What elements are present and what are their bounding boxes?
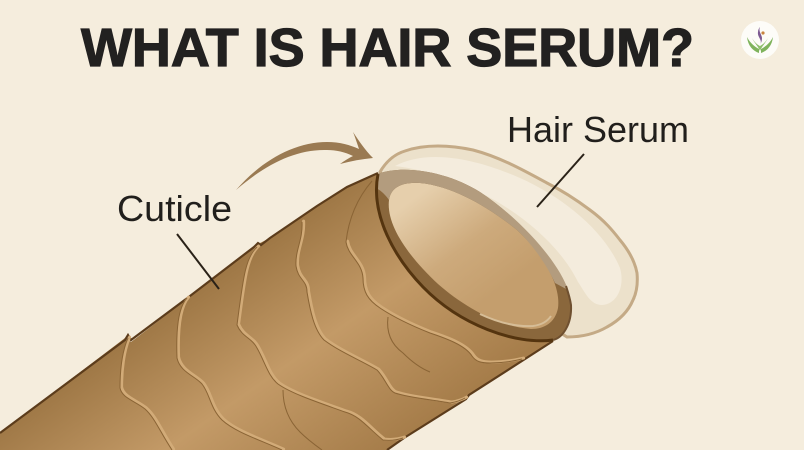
ring serum-tinted upper arc bbox=[376, 170, 568, 290]
pointer: hair serum bbox=[537, 154, 584, 207]
ring dark outer edge bbox=[376, 174, 553, 341]
hair outline top bbox=[0, 173, 378, 433]
inner face lower highlight bbox=[480, 314, 551, 326]
cuticle scale highlights bbox=[122, 221, 524, 449]
serum highlight bbox=[395, 157, 622, 305]
ring inner face bbox=[389, 183, 558, 329]
hair cut end ring bbox=[375, 170, 571, 341]
label: cuticle: Cuticle bbox=[117, 188, 232, 229]
hair outline bottom bbox=[387, 341, 553, 450]
icon: logo bbox=[741, 21, 779, 59]
serum blob bbox=[380, 146, 637, 337]
ring right edge bbox=[553, 286, 571, 340]
pointer: cuticle bbox=[177, 234, 219, 289]
cuticle scale lines bbox=[120, 181, 522, 450]
title: WHAT IS HAIR SERUM? bbox=[81, 18, 694, 78]
arrow bbox=[236, 132, 373, 190]
label: hair serum: Hair Serum bbox=[507, 109, 689, 150]
hair shaft bbox=[0, 173, 553, 450]
